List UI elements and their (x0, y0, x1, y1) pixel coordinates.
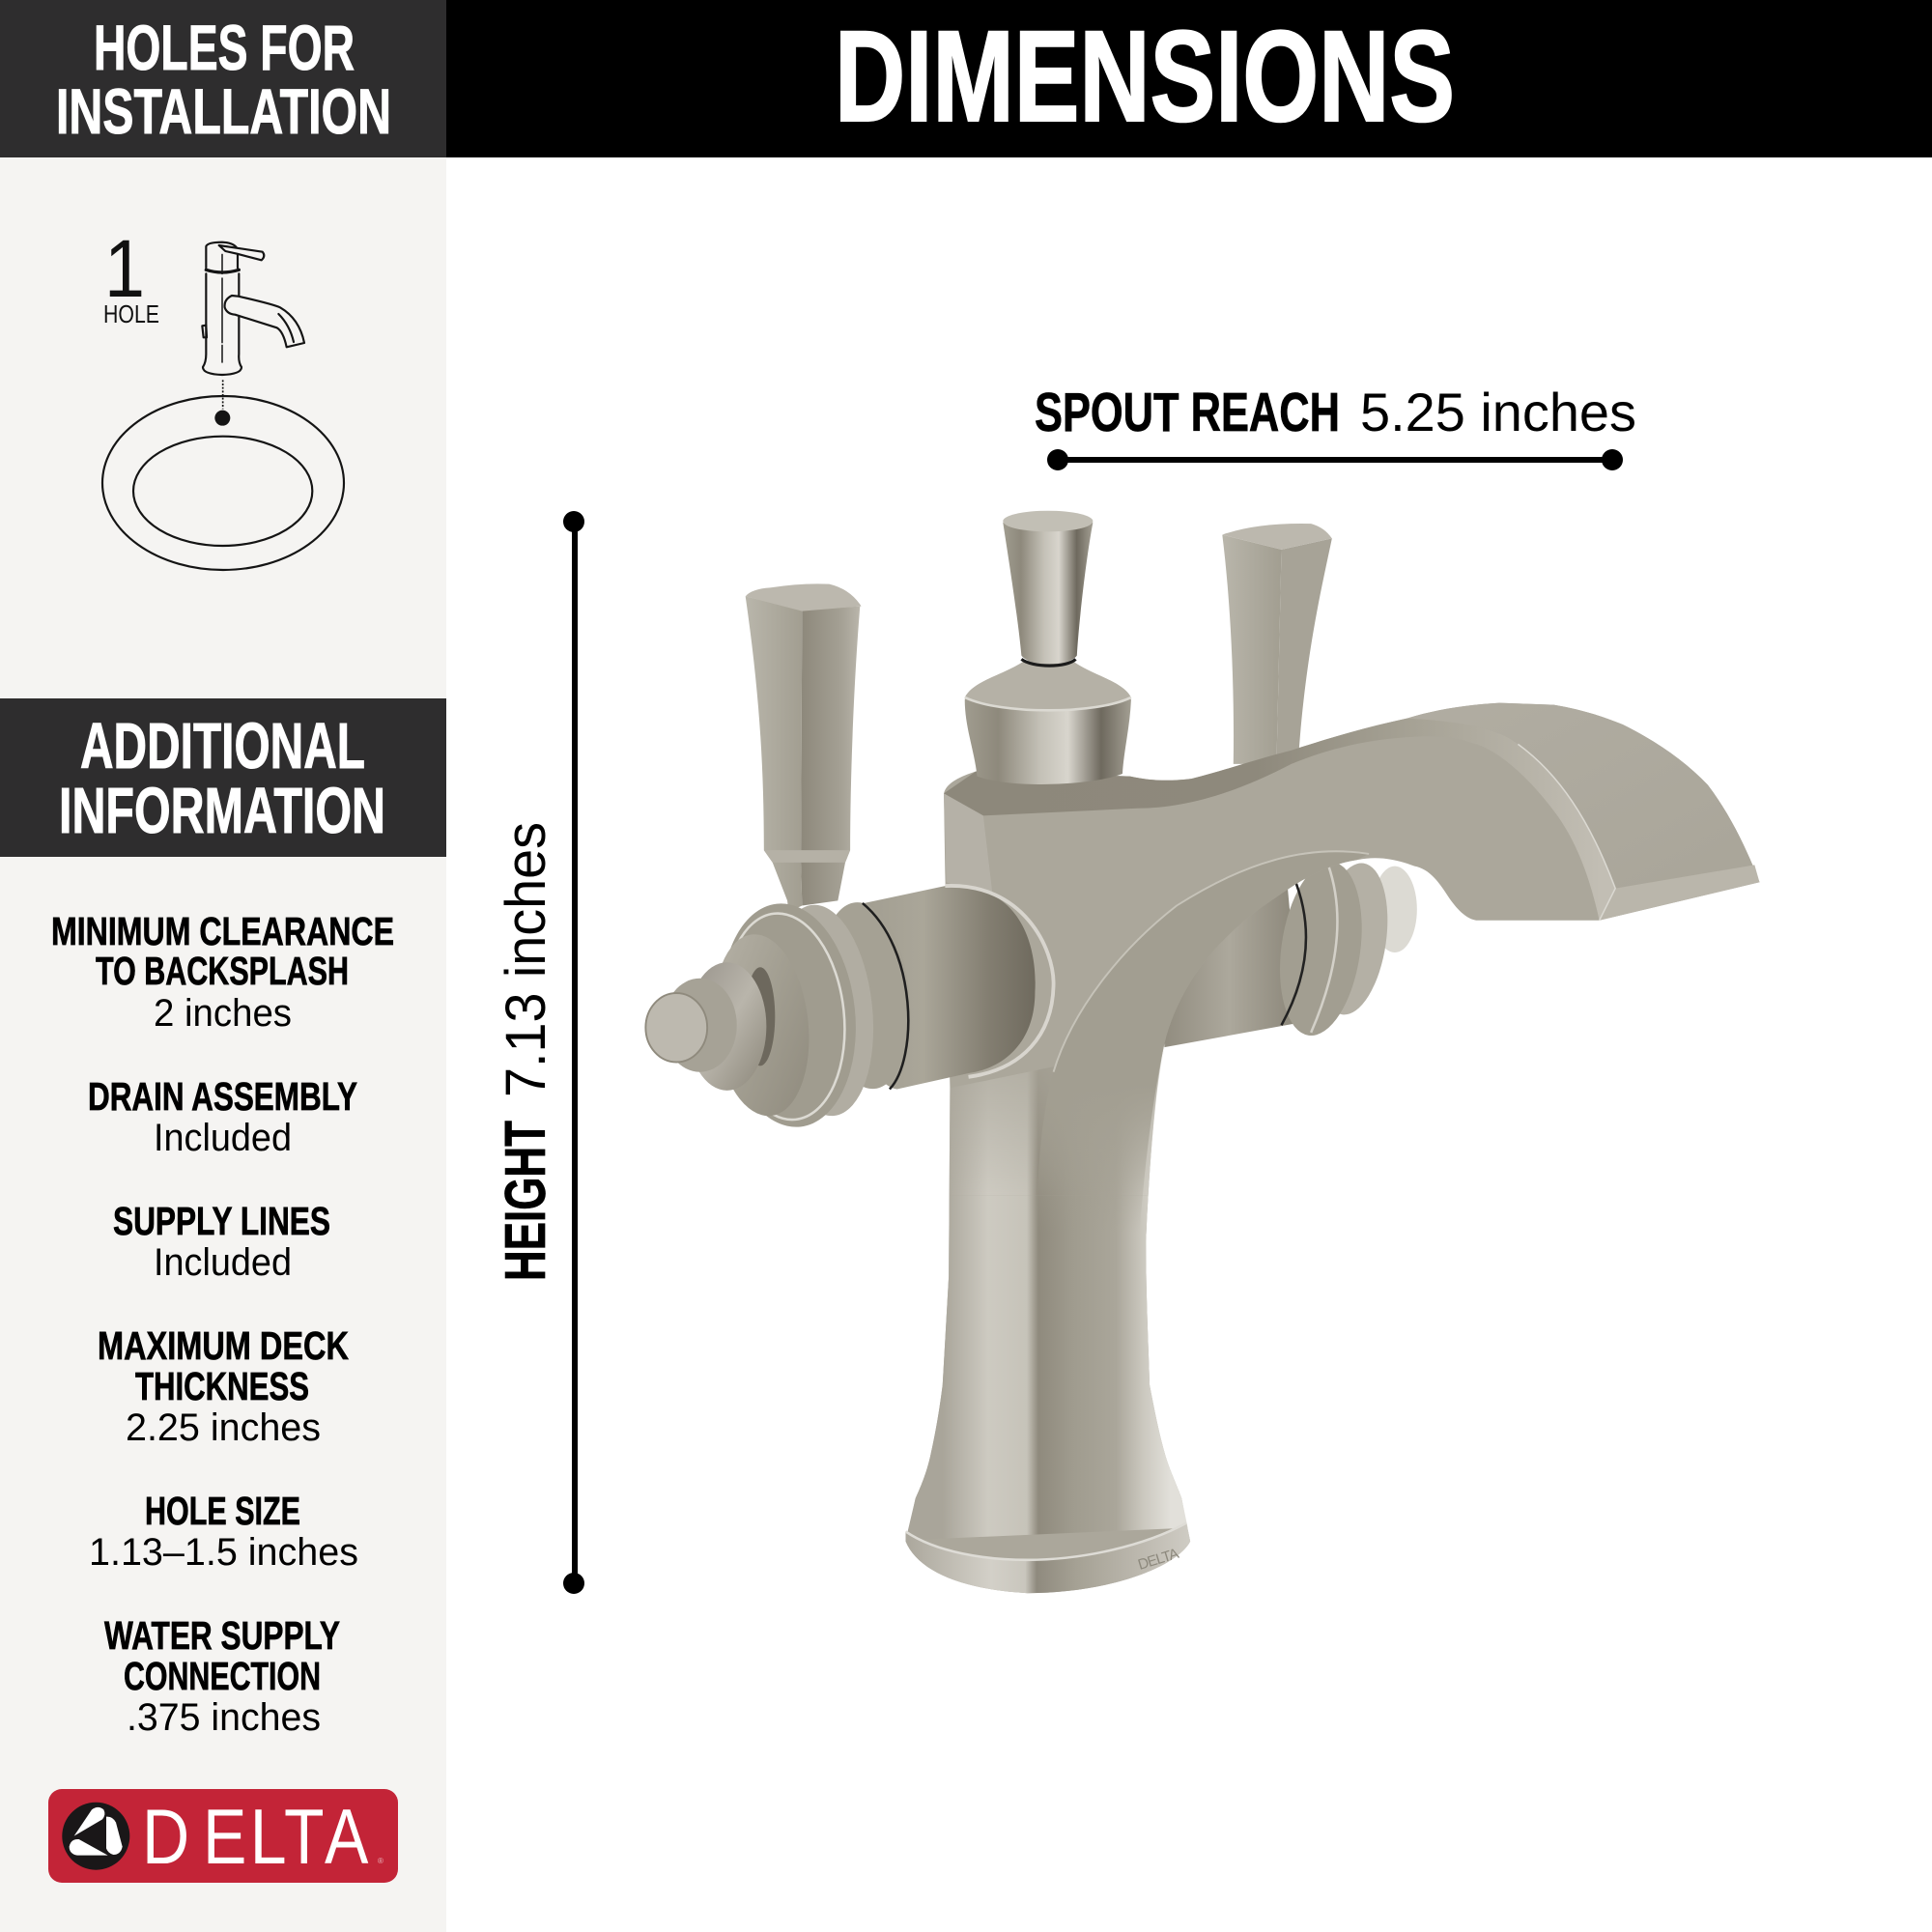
spec: hole size: HOLE SIZE (145, 1489, 300, 1533)
spec: supply lines: SUPPLY LINES (113, 1199, 330, 1243)
base rim (905, 1523, 1190, 1593)
spec: minimum clearance: TO BACKSPLASH (96, 949, 349, 993)
logo mark on base: DELTA (1136, 1546, 1181, 1574)
icon: faucet line drawing over sink (102, 242, 344, 570)
spec: drain assembly: DRAIN ASSEMBLY (88, 1074, 357, 1119)
hole count label: HOLE (103, 299, 159, 328)
spec: maximum deck thickness: MAXIMUM DECK (98, 1323, 349, 1368)
spec: drain assembly: Included (154, 1117, 292, 1159)
logo: delta: DELTA (142, 1792, 368, 1880)
spec: supply lines (113, 1199, 330, 1284)
dimension: spout reach (1035, 382, 1636, 470)
spec: hole size (89, 1489, 358, 1574)
spec: hole size: 1.13–1.5 inches (89, 1531, 358, 1574)
rim highlight (905, 1523, 1186, 1560)
heading bar: additional information: INFORMATION (59, 775, 385, 847)
left handle cylinder (848, 886, 1036, 1090)
faucet body and spout (905, 703, 1759, 1593)
spout end face (1407, 703, 1759, 889)
spec: maximum deck thickness (98, 1323, 349, 1449)
spec: minimum clearance (51, 909, 394, 1035)
dimension: spout reach: 5.25 inches (1360, 382, 1636, 442)
arch crease highlight (1054, 851, 1369, 1072)
spec: supply lines: Included (154, 1241, 292, 1284)
heading bar: additional information (0, 698, 446, 857)
spec: minimum clearance: 2 inches (154, 992, 292, 1035)
left handle flange and knob (645, 896, 919, 1134)
shoulder highlight (944, 793, 993, 899)
stem shading (905, 1043, 1188, 1540)
hole count label: 1 (104, 223, 145, 314)
heading bar: additional information: ADDITIONAL (80, 710, 365, 782)
spec: water supply connection (104, 1613, 340, 1739)
left lever (746, 583, 862, 912)
spec: drain assembly (88, 1074, 357, 1159)
spec: maximum deck thickness: THICKNESS (135, 1364, 309, 1408)
dimension: height (494, 511, 584, 1594)
dimension: spout reach: SPOUT REACH (1035, 382, 1340, 443)
spout edge highlight (1518, 744, 1615, 921)
back lever (1222, 524, 1332, 764)
center handle (965, 511, 1131, 784)
panel: left sidebar (0, 0, 446, 1932)
heading bar: holes for installation: INSTALLATION (56, 75, 391, 147)
dimension: height: HEIGHT (494, 1121, 557, 1281)
spec: water supply connection: WATER SUPPLY (104, 1613, 340, 1658)
spec: water supply connection: CONNECTION (124, 1654, 321, 1698)
logo: delta (48, 1789, 398, 1883)
right knob (1158, 857, 1417, 1047)
spec: minimum clearance: MINIMUM CLEARANCE (51, 909, 394, 953)
logo: delta: ® (378, 1857, 384, 1865)
dimension: height: 7.13 inches (495, 822, 557, 1097)
spout top bevel (944, 719, 1615, 921)
title bar: dimensions (446, 0, 1932, 157)
arch band (1037, 851, 1369, 1233)
heading bar: holes for installation: HOLES FOR (94, 12, 355, 83)
spec: water supply connection: .375 inches (127, 1696, 321, 1739)
heading bar: holes for installation (0, 0, 446, 157)
spout lip (1600, 865, 1759, 921)
product photo: faucet (645, 511, 1759, 1593)
mount flare highlight (945, 886, 1054, 1077)
spec: maximum deck thickness: 2.25 inches (126, 1406, 321, 1449)
title bar: dimensions: DIMENSIONS (835, 5, 1455, 149)
hole count label (103, 223, 159, 328)
